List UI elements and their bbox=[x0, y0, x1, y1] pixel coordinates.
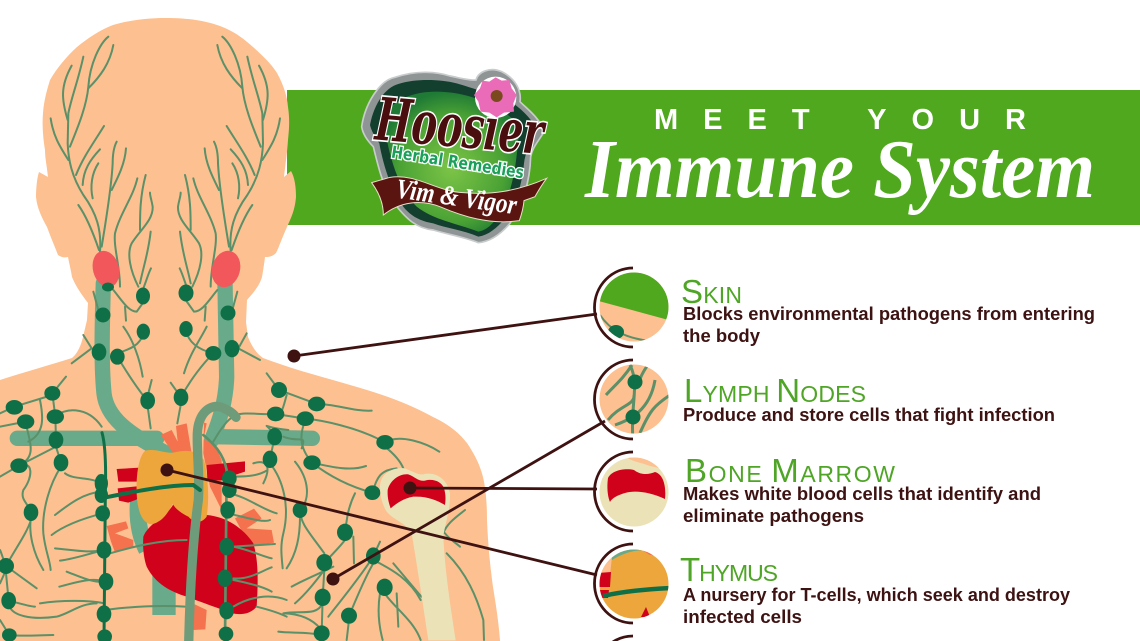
title line one: MEET YOUR bbox=[654, 104, 1026, 136]
logo ribbon text: Vim & Vigor bbox=[394, 174, 520, 221]
head lymph vessels bbox=[51, 37, 280, 321]
bone marrow icon bbox=[600, 458, 668, 526]
lymph ducts bbox=[17, 283, 312, 615]
parotid nodes bbox=[89, 248, 244, 290]
lymph bracket bbox=[594, 360, 633, 439]
logo bbox=[362, 70, 549, 243]
humerus bone with marrow bbox=[380, 468, 456, 640]
skin description: Blocks environmental pathogens from entering bbox=[683, 304, 1095, 324]
thymus icon bbox=[600, 550, 668, 618]
next item bracket bbox=[610, 636, 633, 641]
logo green field bbox=[383, 92, 520, 232]
body silhouette bbox=[0, 18, 500, 641]
item: skin bbox=[594, 265, 1095, 347]
thymus description: infected cells bbox=[683, 607, 802, 627]
lymph heading: LYMPH NODES bbox=[684, 372, 866, 409]
heart and thymus bbox=[107, 423, 274, 630]
skin bracket bbox=[594, 268, 633, 347]
item: thymus bbox=[594, 544, 1070, 627]
connector: bone marrow bbox=[404, 482, 597, 494]
bone marrow description bbox=[683, 484, 1041, 526]
heart bbox=[143, 504, 258, 614]
torso lymph vessels bbox=[0, 327, 484, 640]
logo flower bbox=[474, 77, 517, 118]
skin description bbox=[683, 304, 1095, 346]
item: bone marrow bbox=[594, 452, 1041, 531]
skin description: the body bbox=[683, 326, 760, 346]
thick lymph trunks bbox=[102, 406, 236, 641]
connector: skin bbox=[288, 314, 597, 362]
thymus bracket bbox=[594, 544, 633, 623]
lymph nodes bbox=[0, 282, 394, 641]
lymph description: Produce and store cells that fight infection bbox=[683, 405, 1055, 425]
thymus bbox=[137, 450, 208, 524]
connector: lymph nodes bbox=[326, 421, 605, 586]
bone marrow description: Makes white blood cells that identify and bbox=[683, 484, 1041, 504]
logo wordmark Hoosier: Hoosier bbox=[371, 83, 549, 168]
bone marrow description: eliminate pathogens bbox=[683, 506, 864, 526]
header banner bbox=[287, 90, 1140, 225]
human body figure bbox=[0, 18, 500, 641]
title line two: Immune System bbox=[584, 123, 1095, 216]
thymus description: A nursery for T-cells, which seek and destroy bbox=[683, 585, 1070, 605]
heart arteries bbox=[117, 461, 245, 503]
bone marrow bracket bbox=[594, 452, 633, 531]
item: lymph nodes bbox=[594, 360, 1055, 440]
bone marrow heading: BONE MARROW bbox=[685, 452, 895, 489]
logo ribbon bbox=[372, 177, 547, 222]
connector: thymus bbox=[160, 464, 597, 575]
heart vessels bbox=[107, 423, 274, 630]
title bbox=[584, 104, 1095, 216]
logo shield bbox=[362, 70, 544, 243]
logo subtitle: Herbal Remedies bbox=[390, 143, 525, 182]
skin heading: SKIN bbox=[681, 273, 742, 310]
thymus heading: THYMUS bbox=[680, 551, 778, 588]
thymus description bbox=[683, 585, 1070, 627]
lymph icon bbox=[600, 364, 668, 434]
skin icon bbox=[600, 272, 668, 342]
